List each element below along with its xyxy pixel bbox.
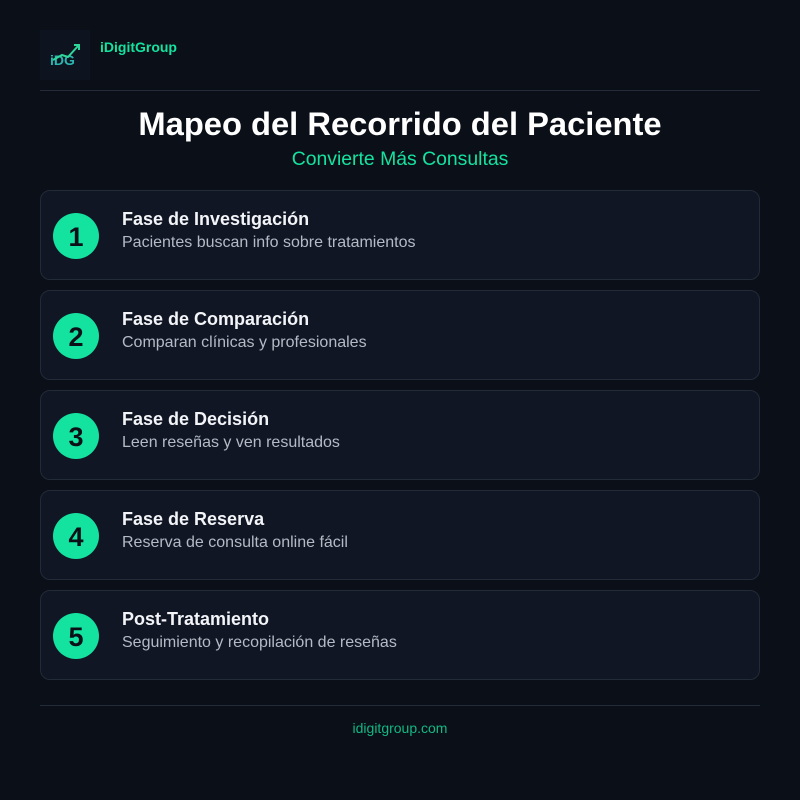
- brand name: iDigitGroup: [100, 39, 177, 55]
- title: Mapeo del Recorrido del Paciente: [138, 105, 662, 142]
- card 3: [40, 390, 760, 480]
- card 5: 5: [68, 622, 84, 652]
- card 5: [40, 590, 760, 680]
- logo: iDG: [50, 52, 75, 68]
- card 4: Reserva de consulta online fácil: [122, 534, 348, 551]
- card 5: Post-Tratamiento: [122, 609, 269, 629]
- subtitle: Convierte Más Consultas: [292, 148, 508, 170]
- card 4: [40, 490, 760, 580]
- card 2: 2: [68, 322, 84, 352]
- footer: idigitgroup.com: [353, 720, 447, 736]
- card 2: Comparan clínicas y profesionales: [122, 334, 367, 351]
- card 5: Seguimiento y recopilación de reseñas: [122, 634, 397, 651]
- card 2: [40, 290, 760, 380]
- card 3: Leen reseñas y ven resultados: [122, 434, 340, 451]
- card 2: Fase de Comparación: [122, 309, 309, 329]
- card 4: Fase de Reserva: [122, 509, 264, 529]
- card 3: Fase de Decisión: [122, 409, 269, 429]
- card 1: 1: [68, 222, 84, 252]
- card 3: 3: [68, 422, 84, 452]
- card 1: Fase de Investigación: [122, 209, 309, 229]
- logo: [40, 30, 90, 80]
- card 1: Pacientes buscan info sobre tratamientos: [122, 234, 416, 251]
- card 1: [40, 190, 760, 280]
- card 4: 4: [68, 522, 84, 552]
